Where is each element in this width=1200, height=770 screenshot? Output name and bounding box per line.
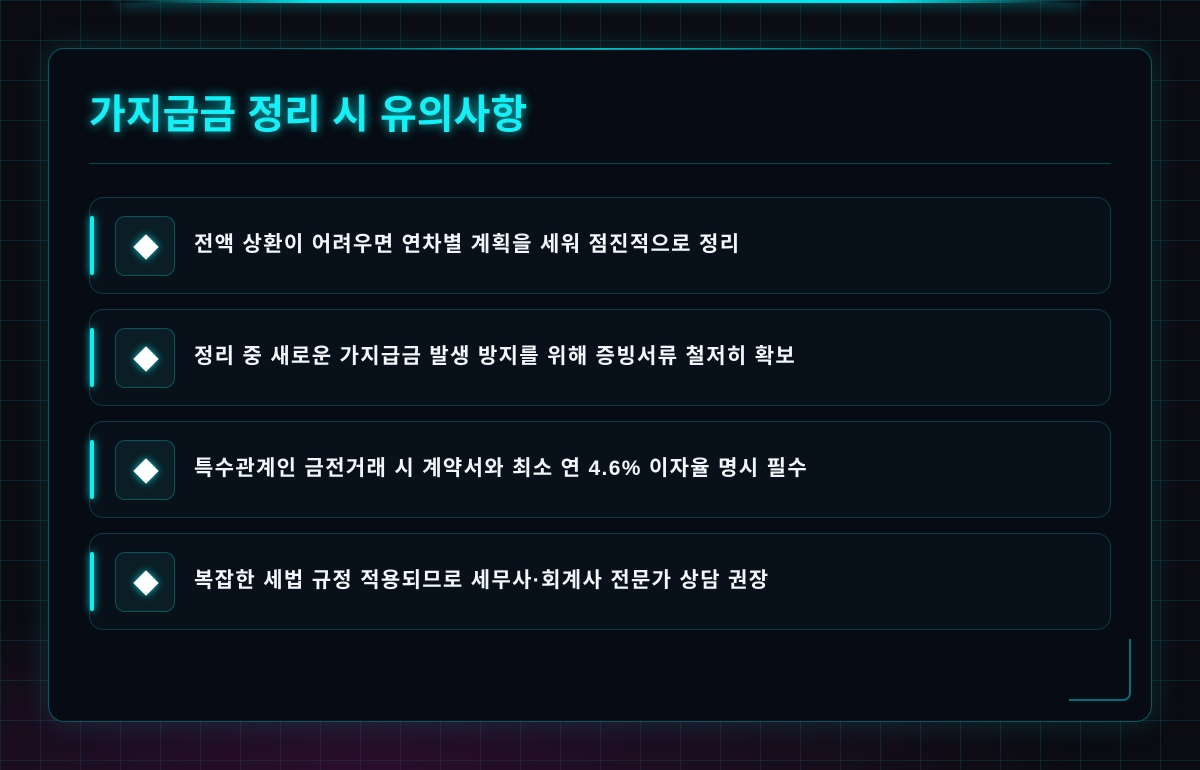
item 3 [89,421,1111,518]
item 1 [89,197,1111,294]
item 2 [89,309,1111,406]
item 4 [89,533,1111,630]
icon: diamond [115,328,175,388]
icon: diamond [115,440,175,500]
text 1: 전액 상환이 어려우면 연차별 계획을 세워 점진적으로 정리 [194,233,740,256]
icon: diamond [115,216,175,276]
text 2: 정리 중 새로운 가지급금 발생 방지를 위해 증빙서류 철저히 확보 [194,345,796,368]
title: 가지급금 정리 시 유의사항 [89,93,527,137]
text 3: 특수관계인 금전거래 시 계약서와 최소 연 4.6% 이자율 명시 필수 [194,457,808,480]
text 4: 복잡한 세법 규정 적용되므로 세무사·회계사 전문가 상담 권장 [194,569,769,592]
icon: diamond [115,552,175,612]
